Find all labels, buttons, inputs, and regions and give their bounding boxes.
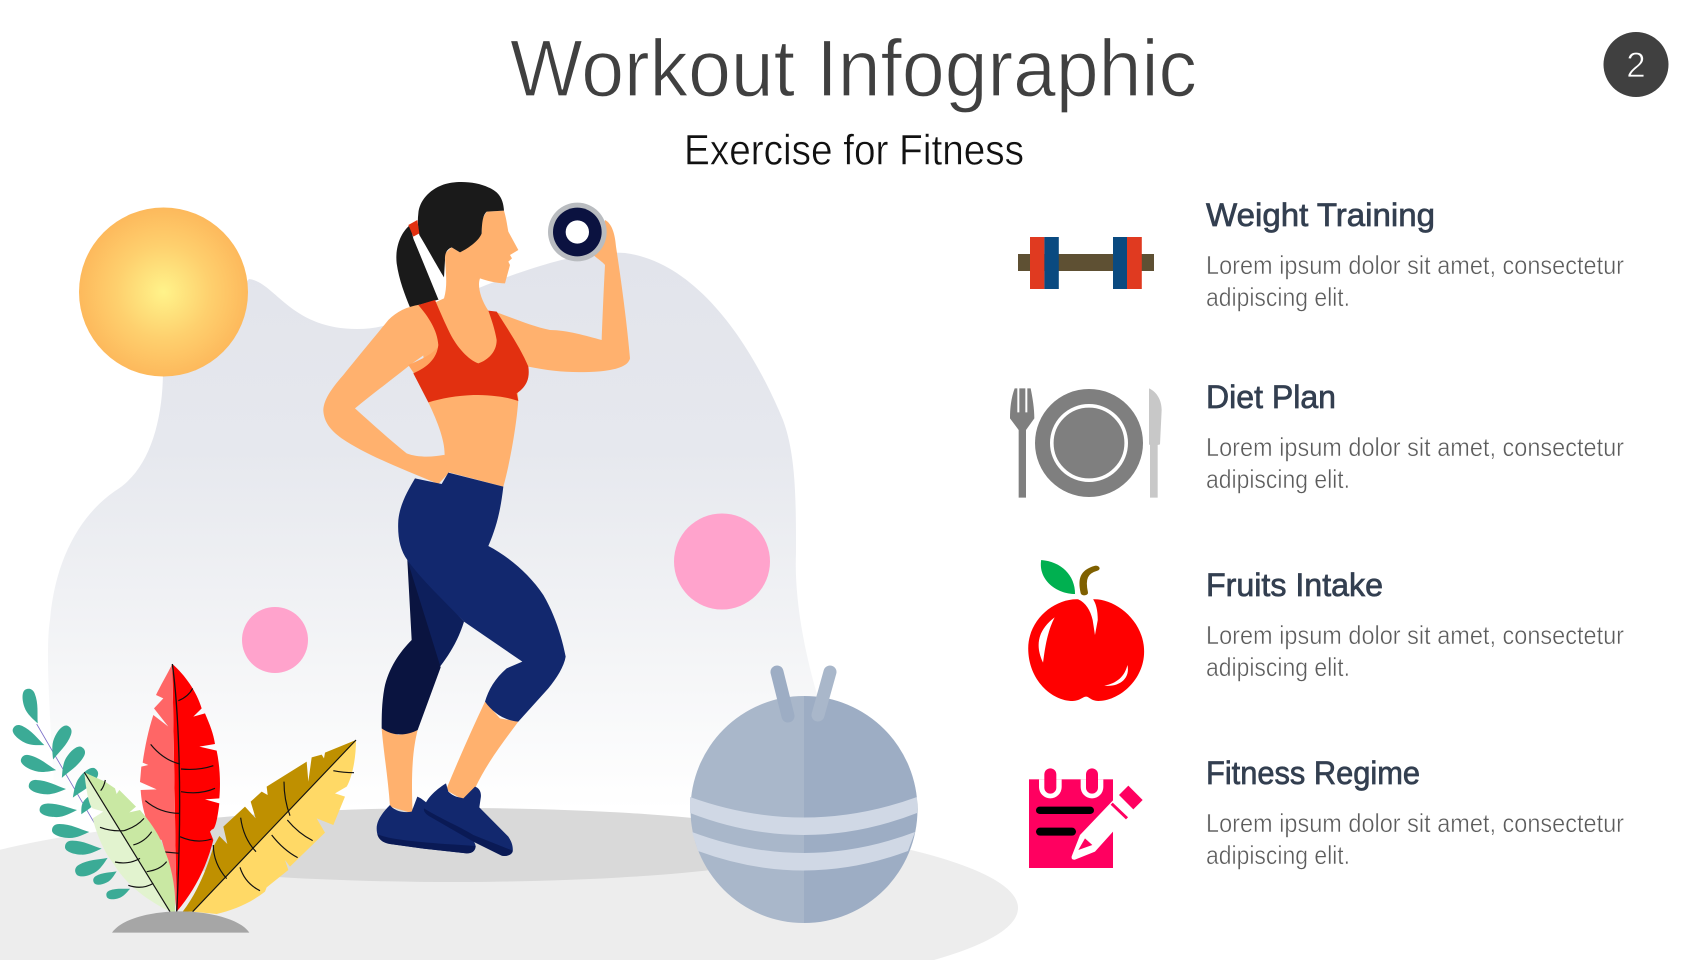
illustration: background blob [48, 253, 825, 830]
page number badge: 2 [1626, 46, 1646, 85]
dumbbell weight [548, 203, 607, 261]
heading: Fruits Intake [1206, 567, 1383, 603]
plant mound [112, 911, 249, 933]
text: Lorem ipsum dolor sit amet, consectetur [1206, 432, 1624, 462]
raised arm [495, 220, 630, 372]
item: diet plan [1010, 379, 1624, 498]
lower body [377, 473, 566, 856]
text: Lorem ipsum dolor sit amet, consectetur [1206, 808, 1624, 838]
sports bra [413, 300, 529, 402]
text: adipiscing elit. [1206, 282, 1350, 312]
gold leaf [183, 740, 356, 914]
back shoe sole [377, 834, 476, 853]
plant group [10, 664, 356, 933]
icon: apple [1028, 560, 1144, 701]
back leg tights [382, 560, 441, 734]
small pink circle [242, 607, 308, 673]
sun circle [79, 208, 248, 376]
ball bands [690, 797, 917, 835]
text: adipiscing elit. [1206, 652, 1350, 682]
light green leaf [84, 772, 175, 912]
text: adipiscing elit. [1206, 464, 1350, 494]
illustration: ground ellipse [0, 809, 1018, 960]
back shoe [377, 797, 476, 853]
page number badge [1604, 32, 1668, 97]
item: fitness regime [1029, 755, 1624, 870]
text: Lorem ipsum dolor sit amet, consectetur [1206, 250, 1624, 280]
heading: Fitness Regime [1206, 755, 1420, 791]
front tights [398, 473, 566, 722]
teal fern [10, 687, 132, 902]
exercise ball [690, 672, 918, 923]
back leg skin [382, 728, 418, 813]
text: Lorem ipsum dolor sit amet, consectetur [1206, 620, 1624, 650]
illustration: ground shadow [103, 808, 803, 882]
item: weight training [1018, 197, 1624, 312]
heading: Weight Training [1206, 197, 1435, 233]
back thigh tights [407, 560, 464, 667]
ponytail [396, 225, 439, 307]
back arm and hand [323, 305, 457, 484]
front shoe sole [424, 808, 513, 856]
hair [418, 182, 504, 277]
text [1206, 250, 1624, 312]
red leaf [140, 664, 220, 912]
text [1206, 432, 1624, 494]
heading: Diet Plan [1206, 379, 1336, 415]
ball handles [777, 672, 788, 716]
upper body [323, 182, 630, 487]
woman figure [323, 182, 630, 856]
front shoe [424, 783, 513, 856]
subtitle: Exercise for Fitness [684, 126, 1024, 174]
text [1206, 808, 1624, 870]
underarm shade [408, 347, 438, 374]
text [1206, 620, 1624, 682]
icon: notebook and pencil [1029, 768, 1143, 868]
ponytail gap [413, 234, 447, 300]
large pink circle [674, 514, 770, 610]
icon: plate, fork and knife [1010, 388, 1162, 498]
icon: dumbbell [1018, 237, 1154, 289]
front leg skin [446, 702, 518, 800]
title: Workout Infographic [510, 24, 1197, 114]
text: adipiscing elit. [1206, 840, 1350, 870]
item: fruits intake [1028, 560, 1624, 701]
torso and neck [418, 211, 518, 487]
hair tie [408, 220, 419, 237]
